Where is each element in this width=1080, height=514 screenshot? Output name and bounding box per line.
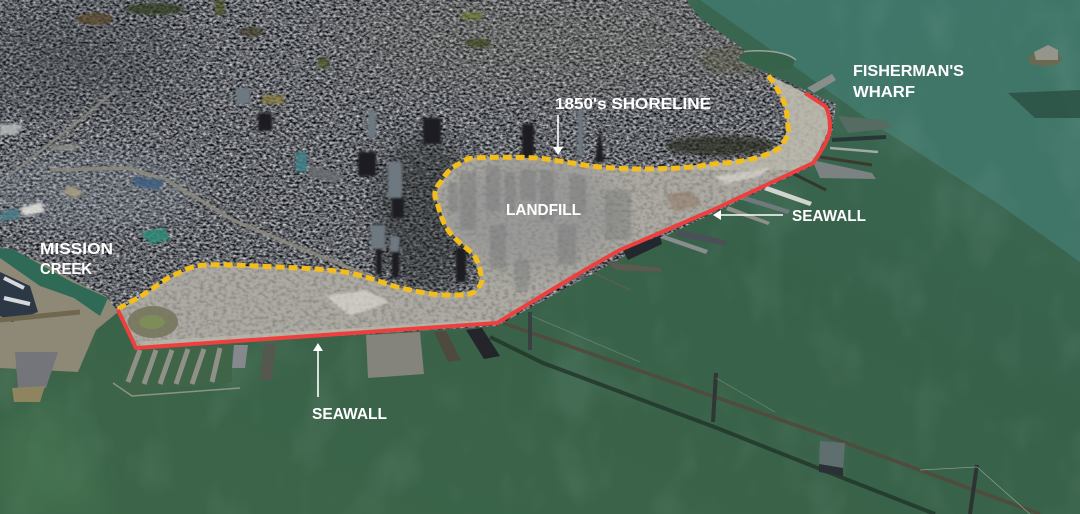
bottom piers	[366, 328, 500, 378]
ballpark	[128, 306, 178, 338]
label: Mission Creek: MISSION	[40, 241, 113, 258]
park patches	[77, 0, 491, 104]
left shore, Mission Creek and piers	[0, 247, 118, 402]
label: Mission Creek	[40, 241, 113, 278]
elevated highways	[10, 88, 118, 175]
label: Fisherman's Wharf: FISHERMAN'S	[853, 63, 964, 80]
landfill overlay	[120, 75, 828, 346]
large building roofs	[0, 124, 345, 244]
label: Mission Creek: CREEK	[40, 261, 92, 278]
label: Fisherman's Wharf	[853, 63, 964, 101]
eastern waterfront piers	[592, 74, 892, 290]
city land mass	[0, 0, 836, 339]
label: seawall bottom: SEAWALL	[312, 406, 387, 423]
label: Fisherman's Wharf: WHARF	[853, 84, 915, 101]
label: landfill: LANDFILL	[506, 202, 581, 219]
arrow: seawall right pointer	[713, 210, 783, 220]
downtown towers	[258, 113, 604, 282]
Alcatraz island	[1028, 45, 1062, 66]
label: 1850's shoreline: 1850's SHORELINE	[555, 96, 711, 113]
arrow: seawall bottom pointer	[313, 343, 323, 397]
bay bridge	[490, 312, 1040, 514]
shoreline dashed yellow line	[118, 75, 788, 309]
arrow: shoreline pointer	[553, 115, 563, 155]
street grid	[0, 0, 770, 190]
label: seawall right: SEAWALL	[792, 208, 866, 225]
seawall red line	[118, 93, 830, 348]
marina	[113, 344, 276, 396]
